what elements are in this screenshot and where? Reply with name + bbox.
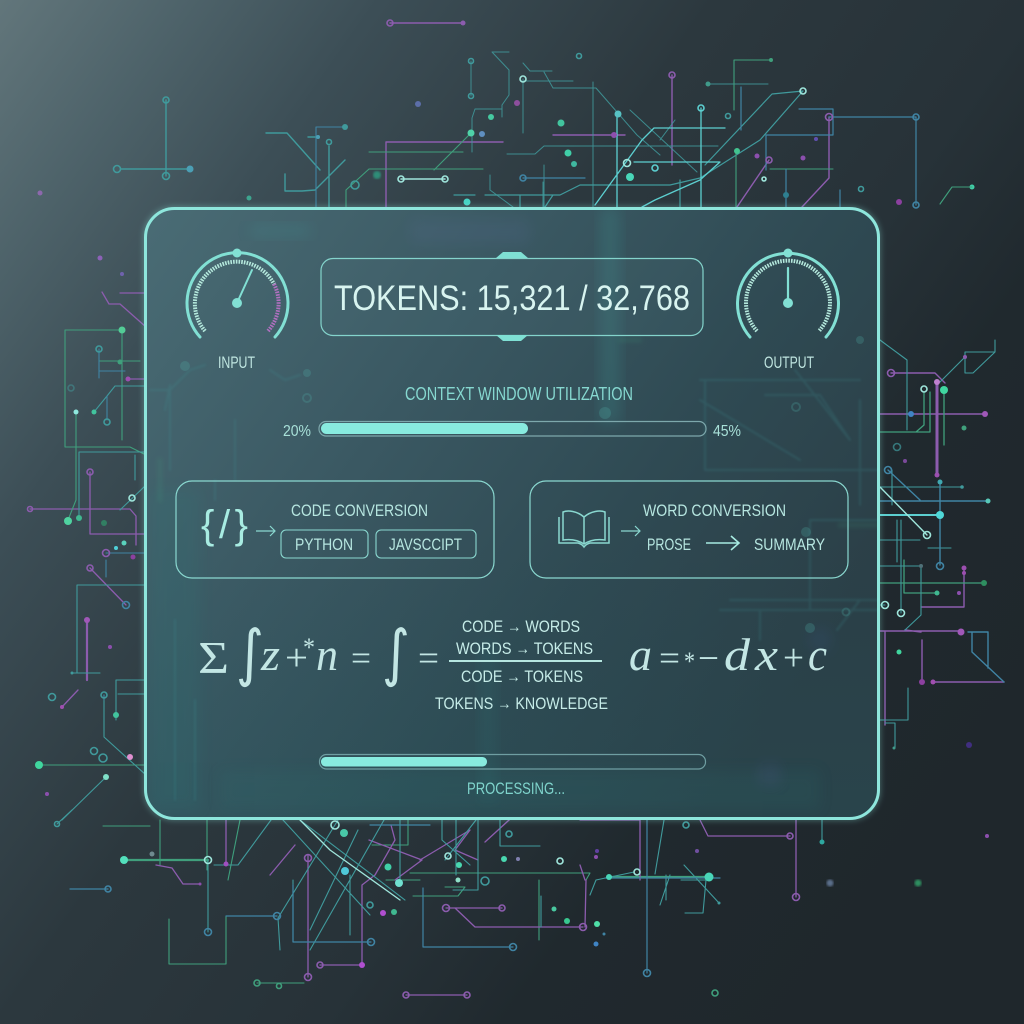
formula: left expression: = <box>351 638 371 678</box>
progress bar <box>320 754 706 769</box>
label: output: OUTPUT <box>764 353 814 372</box>
heading: code conversion: CODE CONVERSION <box>291 501 428 520</box>
arrow: word <box>621 526 640 536</box>
formula: right expression: a <box>629 629 652 680</box>
label: 20 percent: 20% <box>283 423 311 440</box>
fraction text: CODE → WORDS <box>462 617 580 636</box>
gauge: output <box>737 248 839 372</box>
label: summary: SUMMARY <box>754 535 825 554</box>
arrow: code <box>256 526 275 536</box>
formula: left expression: * <box>303 633 315 662</box>
circuit network: top <box>342 20 974 208</box>
formula <box>198 616 827 713</box>
blurred panel background traces <box>150 208 880 810</box>
formula: right expression: = <box>659 638 680 678</box>
circuit network: bottom <box>54 810 989 998</box>
heading: context window: CONTEXT WINDOW UTILIZATION <box>405 384 633 404</box>
label: prose: PROSE <box>647 535 691 554</box>
formula: right expression: − <box>698 638 719 678</box>
token count text: TOKENS: 15,321 / 32,768 <box>334 279 690 318</box>
formula: left expression: ∫ <box>236 616 264 689</box>
formula: left expression: + <box>285 637 308 679</box>
label: processing: PROCESSING... <box>467 779 565 798</box>
circuit network: left side <box>28 292 146 820</box>
context window utilization <box>283 384 741 440</box>
circuit network: top-left <box>38 97 345 276</box>
formula: left expression: ∫ <box>382 616 410 689</box>
heading: word conversion: WORD CONVERSION <box>643 501 786 520</box>
circuit network: right side <box>880 340 1004 750</box>
formula: left expression: n <box>316 629 338 680</box>
fraction text: WORDS → TOKENS <box>456 639 593 658</box>
icon: open book <box>559 511 609 547</box>
formula: right expression: * <box>684 647 695 676</box>
formula: left expression: Σ <box>198 632 229 683</box>
panel: code conversion <box>176 481 494 578</box>
glass panel <box>143 206 881 821</box>
panel: word conversion <box>530 481 848 578</box>
chip: javascript <box>376 530 476 558</box>
formula: left expression: = <box>418 638 439 678</box>
formula: right expression: + <box>783 637 804 679</box>
icon: code brackets: {/} <box>201 503 248 547</box>
formula: right expression: c <box>808 629 827 680</box>
arrow: prose to summary <box>706 536 739 550</box>
label: input: INPUT <box>218 353 255 372</box>
label: 45 percent: 45% <box>713 423 741 440</box>
formula: right expression: x <box>754 629 779 680</box>
chip: javascript: JAVSCCIPT <box>389 535 462 554</box>
fraction text: CODE → TOKENS <box>461 667 583 686</box>
chip: python: PYTHON <box>295 535 353 554</box>
token counter <box>321 252 703 341</box>
formula: right expression: d <box>724 629 751 680</box>
utilization bar <box>319 422 706 436</box>
formula: left expression: z <box>260 629 280 680</box>
formula: right expression <box>629 629 827 680</box>
fraction text <box>435 617 608 713</box>
chip: python <box>281 530 368 558</box>
fraction text: TOKENS → KNOWLEDGE <box>435 694 608 713</box>
formula: left expression <box>198 616 439 689</box>
gauge: input <box>187 248 288 372</box>
